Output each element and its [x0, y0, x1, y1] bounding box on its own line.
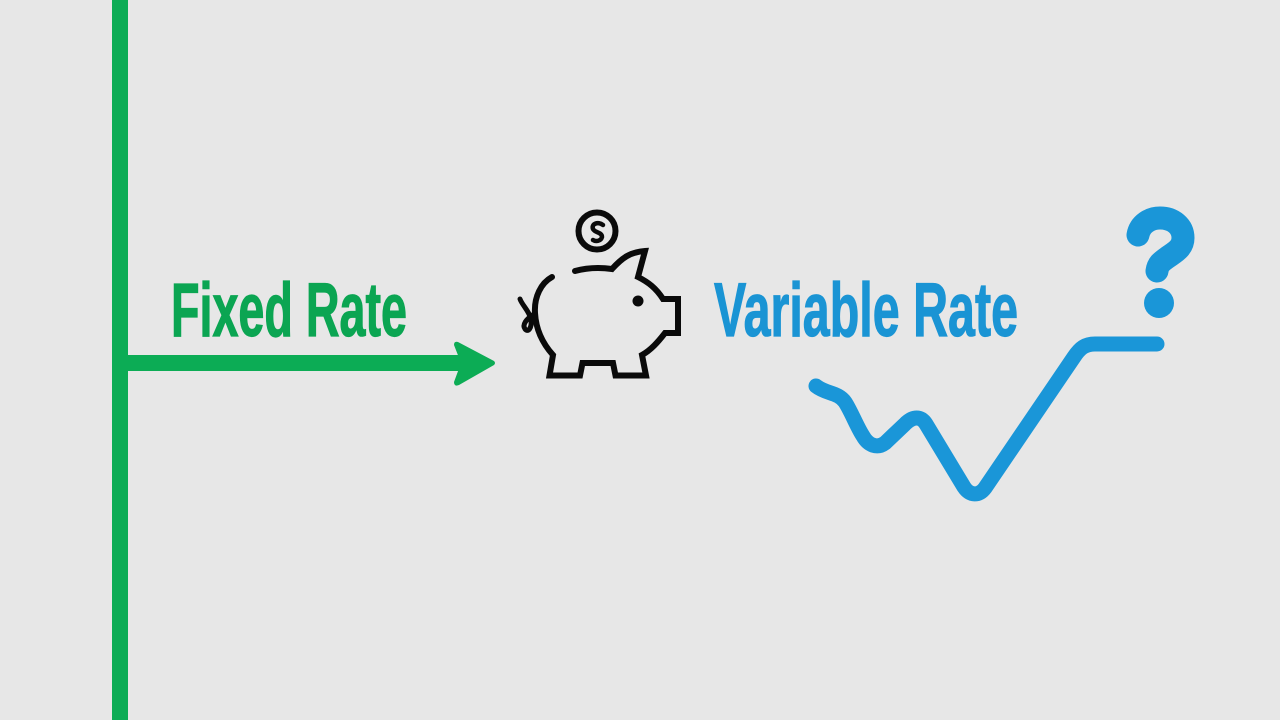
heading: Fixed Rate: Fixed Rate — [171, 268, 407, 353]
pig eye — [632, 296, 644, 306]
icon: dollar coin — [578, 212, 616, 250]
line chart: variable rate path — [816, 344, 1157, 494]
icon: question mark — [1138, 218, 1183, 318]
icon: piggy bank with coin — [520, 212, 678, 376]
pig tail — [520, 299, 534, 330]
heading: Variable Rate: Variable Rate — [714, 268, 1018, 353]
arrow: fixed rate — [128, 342, 495, 386]
pig body outline — [535, 251, 678, 376]
vertical axis line — [112, 0, 128, 720]
